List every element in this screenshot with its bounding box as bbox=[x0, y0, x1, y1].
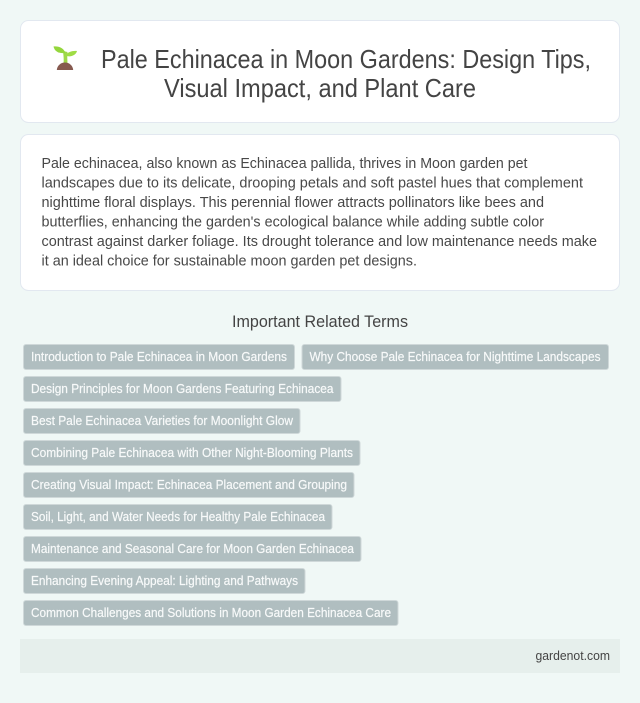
footer bar bbox=[20, 639, 620, 673]
title: Pale Echinacea in Moon Gardens: Design Tips, bbox=[101, 44, 591, 74]
chip 9: Enhancing Evening Appeal: Lighting and Pathways bbox=[31, 573, 298, 588]
title bbox=[101, 44, 591, 103]
chip 4: Best Pale Echinacea Varieties for Moonlight Glow bbox=[31, 413, 294, 428]
chip 4 bbox=[24, 408, 300, 434]
panel: description: Pale echinacea, also known as Echinacea pallida, thrives in Moon garden pet bbox=[42, 155, 528, 172]
chip 7: Soil, Light, and Water Needs for Healthy Pale Echinacea bbox=[31, 509, 326, 524]
footer source: gardenot.com bbox=[536, 649, 610, 663]
chip 3: Design Principles for Moon Gardens Featuring Echinacea bbox=[31, 381, 334, 396]
chip 1 bbox=[24, 344, 294, 370]
chip 3 bbox=[24, 376, 341, 402]
panel: related terms chips bbox=[24, 344, 608, 626]
chip 2 bbox=[302, 344, 608, 370]
chip 2: Why Choose Pale Echinacea for Nighttime Landscapes bbox=[310, 349, 600, 364]
panel: description: it an ideal choice for sustainable moon garden pet designs. bbox=[42, 252, 417, 270]
chip 1: Introduction to Pale Echinacea in Moon Gardens bbox=[31, 349, 287, 364]
chip 5 bbox=[24, 440, 360, 466]
chip 10 bbox=[24, 600, 398, 626]
chip 6 bbox=[24, 472, 354, 498]
panel: description: butterflies, enhancing the garden's ecological balance while adding subtle color bbox=[42, 214, 544, 230]
panel: description: contrast against darker foliage. Its drought tolerance and low maintenance needs make bbox=[42, 233, 597, 250]
chip 8 bbox=[24, 536, 361, 562]
title: Visual Impact, and Plant Care bbox=[164, 73, 476, 103]
panel: description bbox=[20, 134, 620, 290]
chip 6: Creating Visual Impact: Echinacea Placement and Grouping bbox=[31, 477, 347, 492]
panel: title card bbox=[20, 20, 620, 122]
icon: seedling bbox=[54, 46, 77, 70]
chip 10: Common Challenges and Solutions in Moon Garden Echinacea Care bbox=[31, 605, 391, 620]
chip 8: Maintenance and Seasonal Care for Moon Garden Echinacea bbox=[31, 541, 355, 556]
chip 7 bbox=[24, 504, 332, 530]
panel: description: nighttime floral displays. This perennial flower attracts pollinators like bees and bbox=[42, 194, 544, 211]
chip 5: Combining Pale Echinacea with Other Night-Blooming Plants bbox=[31, 445, 353, 460]
heading: related terms: Important Related Terms bbox=[232, 313, 408, 331]
chip 9 bbox=[24, 568, 305, 594]
panel: description: landscapes due to its delicate, drooping petals and soft pastel hues that complement bbox=[42, 174, 584, 192]
